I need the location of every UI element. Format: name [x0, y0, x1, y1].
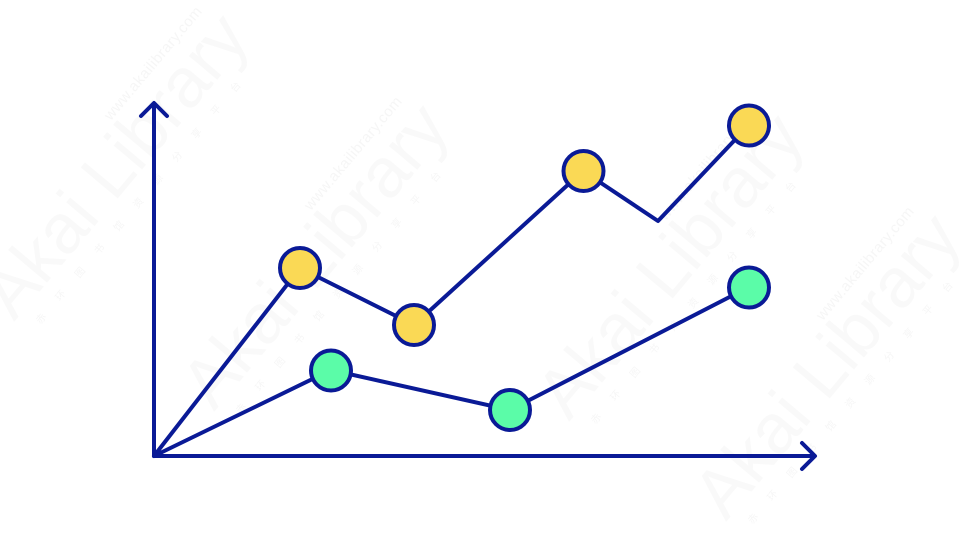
- watermarks: 赤 环 图 书 馆 资 源 分 享 平 台: [31, 71, 249, 327]
- watermarks: www.akailibrary.com: [655, 103, 761, 225]
- y axis arrow: [141, 103, 167, 456]
- watermarks: www.akailibrary.com: [300, 93, 406, 215]
- yellow data series line: [154, 125, 749, 456]
- watermarks: 赤 环 图 书 馆 资 源 分 享 平 台: [586, 171, 804, 427]
- green data points: [311, 268, 769, 430]
- watermarks: Akai Library: [521, 98, 818, 432]
- x axis arrow: [154, 443, 815, 469]
- watermarks: www.akailibrary.com: [100, 3, 206, 125]
- green data series line: [154, 287, 749, 456]
- watermarks: www.akailibrary.com: [812, 203, 918, 325]
- watermarks: 赤 环 图 书 馆 资 源 分 享 平 台: [231, 161, 449, 417]
- yellow data points: [280, 106, 769, 345]
- watermarks: 赤 环 图 书 馆 资 源 分 享 平 台: [743, 271, 960, 527]
- watermarks: Akai Library: [166, 88, 463, 422]
